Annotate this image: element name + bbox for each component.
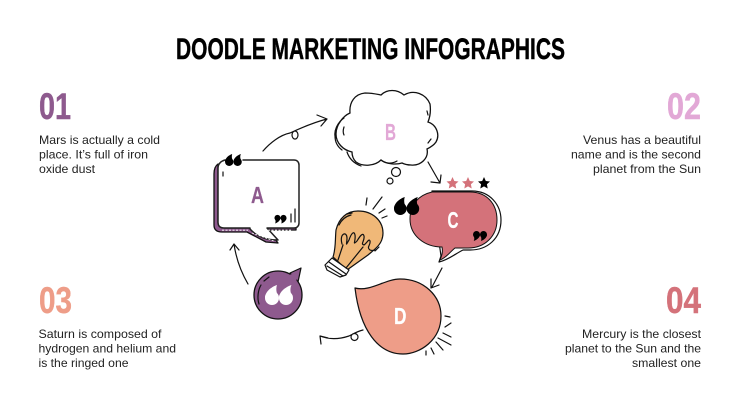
drop bubble D [355, 279, 451, 355]
icon: open quotes A [225, 154, 242, 166]
text block: Saturn [38, 327, 176, 370]
text block: Mars [39, 133, 160, 176]
text block: Mars: place. It’s full of iron [39, 148, 148, 162]
icon: open quotes C [394, 197, 419, 215]
letter A: A [251, 182, 264, 208]
text block: Mercury: planet to the Sun and the [565, 342, 701, 356]
icon: bulb rays [366, 197, 387, 218]
text block: Saturn: hydrogen and helium and [38, 342, 176, 356]
number 03: 03 [39, 279, 72, 321]
icon: thought bubbles [387, 168, 400, 184]
icon: light bulb [325, 197, 387, 277]
bubble with white quotes [254, 268, 302, 319]
arrow C to D [431, 268, 442, 288]
text block: Venus: name and is the second [571, 148, 701, 162]
thought cloud B [335, 90, 438, 184]
panel: 04 Mercury [565, 279, 702, 370]
number 04: 04 [666, 279, 701, 321]
icon: white quotes [265, 285, 293, 305]
text block: Mercury: smallest one [632, 356, 701, 370]
text block: Mars: oxide dust [39, 162, 96, 176]
speech bubble C [394, 177, 501, 262]
text block: Mars: Mars is actually a cold [39, 133, 160, 147]
arrow D to quotes bubble [320, 330, 363, 344]
speech bubble A [214, 154, 299, 243]
panel: 02 Venus [571, 85, 701, 176]
text block: Venus: planet from the Sun [593, 162, 701, 176]
icon: star rating [446, 177, 490, 188]
icon: rays D [426, 316, 451, 355]
text block: Mercury [565, 327, 702, 370]
text block: Mercury: Mercury is the closest [582, 327, 702, 341]
number 02: 02 [667, 85, 701, 127]
icon: close quotes A [274, 215, 286, 224]
text block: Venus: Venus has a beautiful [583, 133, 701, 147]
panel: 03 Saturn [38, 279, 176, 370]
text block: Venus [571, 133, 701, 176]
icon: close quotes C [473, 231, 487, 241]
number 01: 01 [39, 85, 71, 127]
letter D: D [394, 303, 406, 329]
title: DOODLE MARKETING INFOGRAPHICS [176, 33, 565, 66]
letter B: B [385, 119, 396, 145]
text block: Saturn: is the ringed one [38, 356, 129, 370]
letter C: C [448, 207, 459, 233]
text block: Saturn: Saturn is composed of [38, 327, 162, 341]
panel: 01 Mars [39, 85, 160, 176]
arrow A to B [263, 115, 327, 151]
arrow B to C [428, 162, 441, 183]
arrow quotes bubble to A [230, 244, 248, 284]
